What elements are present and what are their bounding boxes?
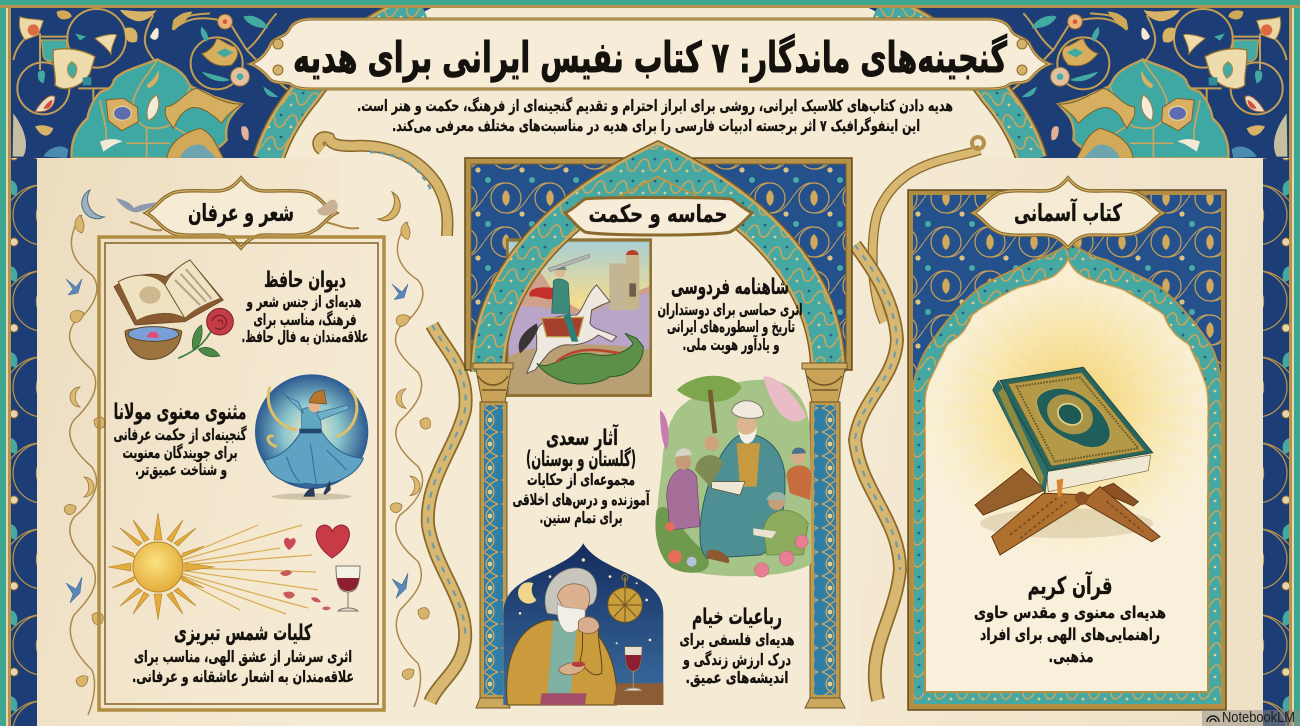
- text: Shams Tabrizi: کلیات شمس تبریزی: [174, 621, 312, 646]
- text: Saadi: برای تمام سنین.: [540, 508, 622, 527]
- intro paragraph: هدیه دادن کتاب‌های کلاسیک ایرانی، روشی برای ابراز احترام و تقدیم گنجینه‌ای از فرهنگ، حکمت و هنر است.: [357, 96, 953, 115]
- heading: epic and wisdom: [565, 198, 752, 235]
- text: Divan of Hafez: علاقه‌مندان به فال حافظ.: [242, 327, 368, 346]
- heading: epic and wisdom: حماسه و حکمت: [588, 200, 728, 228]
- text: Shams Tabrizi: اثری سرشار از عشق الهی، مناسب برای: [134, 647, 352, 666]
- top flourish: [318, 137, 448, 236]
- text: Holy Quran: هدیه‌ای معنوی و مقدس حاوی: [974, 603, 1166, 623]
- right column: [802, 363, 847, 708]
- intro paragraph: این اینفوگرافیک ۷ اثر برجسته ادبیات فارسی را برای هدیه در مناسبت‌های مختلف معرفی می‌کند.: [392, 116, 920, 135]
- heading: poetry and mysticism: [146, 178, 336, 248]
- panel: holy book sheet: [860, 158, 1263, 726]
- teal arch: [913, 242, 1222, 705]
- illustration: whirling dervish: [255, 374, 368, 500]
- text: Divan of Hafez: هدیه‌ای از جنس شعر و: [246, 292, 362, 311]
- text: Shahnameh: [658, 275, 802, 354]
- text: Holy Quran: قرآن کریم: [1028, 571, 1112, 600]
- illustration: Saadi teaching in garden: [655, 376, 812, 577]
- title banner: [250, 8, 1050, 89]
- text: Khayyam: اندیشه‌های عمیق.: [686, 668, 788, 687]
- text: Saadi: [512, 423, 650, 527]
- illustration: open book, bowl and rose: [114, 260, 233, 359]
- sun disc: [133, 542, 183, 592]
- text: Masnavi: و شناخت عمیق‌تر.: [135, 460, 227, 479]
- ribbon flourish: left lower: [428, 325, 466, 702]
- corner ornament: left: [0, 0, 650, 726]
- heading: holy book: [973, 178, 1163, 248]
- text: Khayyam: رباعیات خیام: [692, 605, 782, 630]
- niche: [925, 258, 1208, 692]
- left column: [473, 363, 513, 708]
- text: Shahnameh: و یادآور هویت ملی.: [682, 334, 780, 354]
- text: Holy Quran: [974, 571, 1166, 666]
- hearts: [316, 525, 349, 558]
- text: Saadi: آموزنده و درس‌های اخلاقی: [512, 489, 650, 509]
- text: Divan of Hafez: فرهنگ، مناسب برای: [254, 310, 356, 329]
- parchment sheet: [37, 158, 425, 726]
- text: Shams Tabrizi: [132, 621, 354, 686]
- text: Masnavi: برای جویندگان معنویت: [122, 443, 238, 462]
- text: Shahnameh: تاریخ و اسطوره‌های ایرانی: [667, 317, 795, 336]
- text: Holy Quran: مذهبی.: [1048, 647, 1094, 666]
- left vine border: [64, 215, 105, 715]
- text: Masnavi: [114, 400, 247, 479]
- illuminated frame: [908, 190, 1226, 710]
- illustration: sun, heart and wine: [108, 513, 360, 620]
- text: Saadi: آثار سعدی: [546, 423, 618, 451]
- text: Saadi: (گلستان و بوستان): [526, 446, 636, 471]
- arch band: [488, 160, 828, 372]
- right vine border: [390, 222, 431, 707]
- text: Khayyam: هدیه‌ای فلسفی برای: [680, 630, 794, 649]
- heading: holy book: کتاب آسمانی: [1014, 198, 1122, 227]
- illustration: Quran on wooden stand: [975, 367, 1160, 555]
- intro paragraph: [357, 96, 953, 135]
- text: Saadi: مجموعه‌ای از حکایات: [527, 470, 635, 489]
- illustration: Shahnameh miniature: [506, 238, 652, 397]
- text: Khayyam: درک ارزش زندگی و: [682, 650, 791, 669]
- panel: epic and wisdom: [465, 142, 852, 708]
- text: Divan of Hafez: دیوان حافظ: [264, 268, 346, 293]
- text: Shahnameh: اثری حماسی برای دوستداران: [658, 300, 802, 319]
- arch frame with spandrels: [465, 158, 852, 370]
- text: Divan of Hafez: [242, 268, 368, 346]
- wine glass: [336, 566, 360, 592]
- text: Masnavi: گنجینه‌ای از حکمت عرفانی: [114, 425, 247, 444]
- text: Shams Tabrizi: علاقه‌مندان به اشعار عاشقانه و عرفانی.: [132, 667, 354, 686]
- light rays: [158, 525, 318, 614]
- text: Masnavi: مثنوی معنوی مولانا: [114, 400, 246, 425]
- light burst: [925, 258, 1208, 548]
- panel: poetry and mysticism: [37, 137, 448, 726]
- decorations around heading: [82, 190, 400, 230]
- text: Shahnameh: شاهنامه فردوسی: [671, 275, 789, 300]
- sun spikes: [108, 513, 215, 620]
- title text: گنجینه‌های ماندگار: ۷ کتاب نفیس ایرانی برای هدیه: [293, 33, 1007, 83]
- arch inner opening: [474, 142, 842, 705]
- ribbon flourish: right: [855, 137, 984, 700]
- panel: holy book: [900, 178, 1240, 710]
- text: Holy Quran: راهنمایی‌های الهی برای افراد: [980, 625, 1160, 645]
- corner ornament: right: [650, 0, 1300, 726]
- inner gold frame: [99, 237, 384, 710]
- heading: poetry and mysticism: شعر و عرفان: [188, 199, 294, 227]
- text: Khayyam: [680, 605, 794, 687]
- illustration: Khayyam under night sky: [503, 543, 663, 705]
